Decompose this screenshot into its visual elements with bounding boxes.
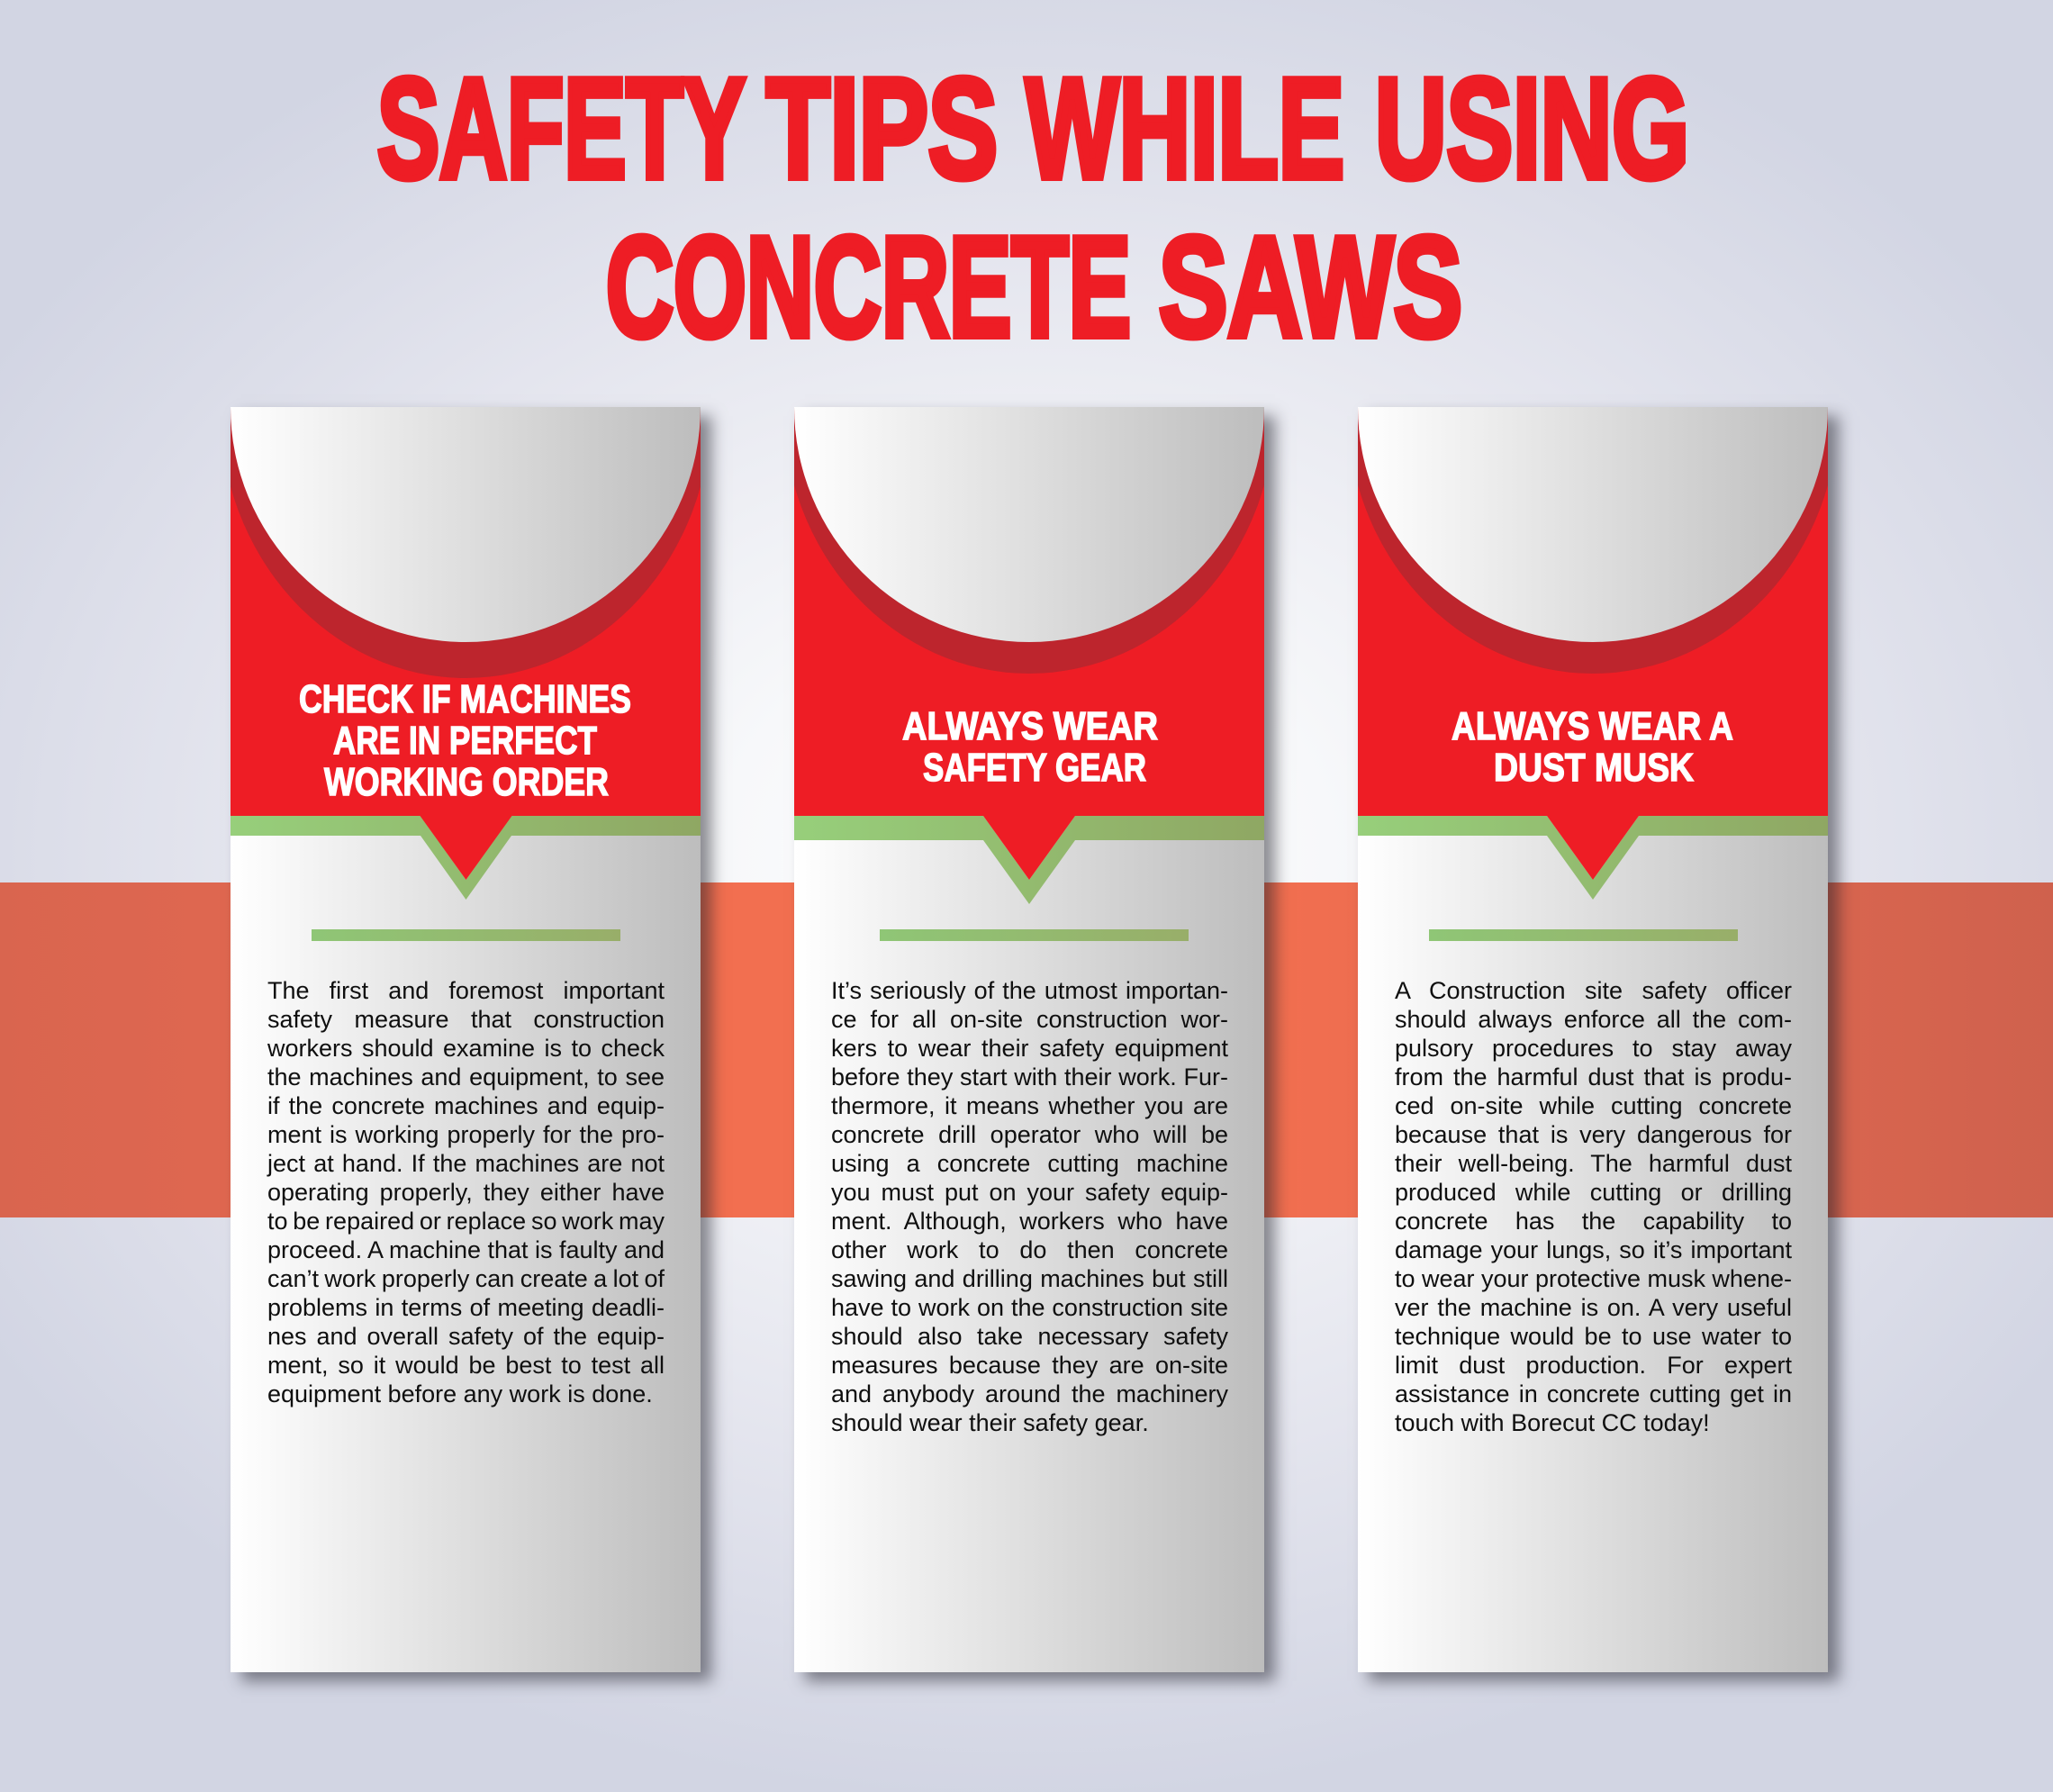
body text: produced while cutting or drilling bbox=[1395, 1179, 1792, 1206]
body text: safety measure that construction bbox=[267, 1006, 665, 1033]
body text bbox=[1395, 977, 1792, 1436]
body text: should also take necessary safety bbox=[831, 1323, 1228, 1350]
body text: can’t work properly can create a lot of bbox=[267, 1265, 665, 1292]
title: CONCRETE bbox=[606, 208, 1131, 367]
body text: ment is working properly for the pro- bbox=[267, 1121, 665, 1148]
body text: proceed. A machine that is faulty and bbox=[267, 1236, 665, 1263]
body text: touch with Borecut CC today! bbox=[1395, 1409, 1710, 1436]
heading: ALWAYS WEAR A bbox=[1452, 704, 1733, 748]
body text: workers should examine is to check bbox=[267, 1035, 665, 1062]
heading: DUST MUSK bbox=[1494, 746, 1694, 790]
body text: should always enforce all the com- bbox=[1395, 1006, 1792, 1033]
body text: you must put on your safety equip- bbox=[831, 1179, 1228, 1206]
body text: if the concrete machines and equip- bbox=[267, 1092, 665, 1119]
heading: ALWAYS WEAR bbox=[902, 704, 1158, 748]
body text: ment, so it would be best to test all bbox=[267, 1352, 665, 1379]
body text: equipment before any work is done. bbox=[267, 1380, 653, 1407]
body text bbox=[267, 977, 665, 1407]
panel: check if machines bbox=[231, 407, 701, 1672]
body text: A Construction site safety officer bbox=[1395, 977, 1792, 1004]
body text: and anybody around the machinery bbox=[831, 1380, 1228, 1407]
body text: It’s seriously of the utmost importan- bbox=[831, 977, 1228, 1004]
body text: the machines and equipment, to see bbox=[267, 1063, 665, 1091]
orange background band bbox=[0, 882, 2053, 1217]
body text: ced on-site while cutting concrete bbox=[1395, 1092, 1792, 1119]
body text: kers to wear their safety equipment bbox=[831, 1035, 1228, 1062]
body text: sawing and drilling machines but still bbox=[831, 1265, 1228, 1292]
title: TIPS bbox=[766, 50, 998, 208]
body text: assistance in concrete cutting get in bbox=[1395, 1380, 1792, 1407]
panel: always wear safety gear bbox=[794, 407, 1264, 1672]
heading bbox=[1452, 704, 1733, 790]
body text: ject at hand. If the machines are not bbox=[267, 1150, 665, 1177]
heading: SAFETY GEAR bbox=[923, 746, 1146, 790]
body text: before they start with their work. Fur- bbox=[831, 1063, 1228, 1091]
heading bbox=[902, 704, 1158, 790]
body text: other work to do then concrete bbox=[831, 1236, 1228, 1263]
body text: from the harmful dust that is produ- bbox=[1395, 1063, 1792, 1091]
body text: have to work on the construction site bbox=[831, 1294, 1228, 1321]
body text: ment. Although, workers who have bbox=[831, 1208, 1228, 1235]
title: USING bbox=[1375, 50, 1689, 208]
body text: using a concrete cutting machine bbox=[831, 1150, 1228, 1177]
heading bbox=[299, 677, 631, 804]
body text: to wear your protective musk whene- bbox=[1395, 1265, 1792, 1292]
heading: CHECK IF MACHINES bbox=[299, 677, 631, 721]
body text: limit dust production. For expert bbox=[1395, 1352, 1792, 1379]
body text: concrete drill operator who will be bbox=[831, 1121, 1228, 1148]
body text: ver the machine is on. A very useful bbox=[1395, 1294, 1792, 1321]
title bbox=[376, 50, 1689, 367]
body text: operating properly, they either have bbox=[267, 1179, 665, 1206]
body text: problems in terms of meeting deadli- bbox=[267, 1294, 665, 1321]
body text: ce for all on-site construction wor- bbox=[831, 1006, 1228, 1033]
title: SAWS bbox=[1159, 208, 1462, 367]
title: SAFETY bbox=[377, 50, 744, 208]
body text: nes and overall safety of the equip- bbox=[267, 1323, 665, 1350]
body text: pulsory procedures to stay away bbox=[1395, 1035, 1792, 1062]
body text bbox=[831, 977, 1228, 1436]
body text: thermore, it means whether you are bbox=[831, 1092, 1228, 1119]
body text: The first and foremost important bbox=[267, 977, 665, 1004]
body text: their well-being. The harmful dust bbox=[1395, 1150, 1792, 1177]
heading: ARE IN PERFECT bbox=[333, 719, 597, 763]
heading: WORKING ORDER bbox=[324, 760, 609, 804]
body text: because that is very dangerous for bbox=[1395, 1121, 1792, 1148]
body text: to be repaired or replace so work may bbox=[267, 1208, 665, 1235]
body text: should wear their safety gear. bbox=[831, 1409, 1149, 1436]
body text: technique would be to use water to bbox=[1395, 1323, 1792, 1350]
body text: damage your lungs, so it’s important bbox=[1395, 1236, 1792, 1263]
body text: measures because they are on-site bbox=[831, 1352, 1228, 1379]
body text: concrete has the capability to bbox=[1395, 1208, 1792, 1235]
title: WHILE bbox=[1026, 50, 1344, 208]
panel: always wear a dust musk bbox=[1358, 407, 1828, 1672]
